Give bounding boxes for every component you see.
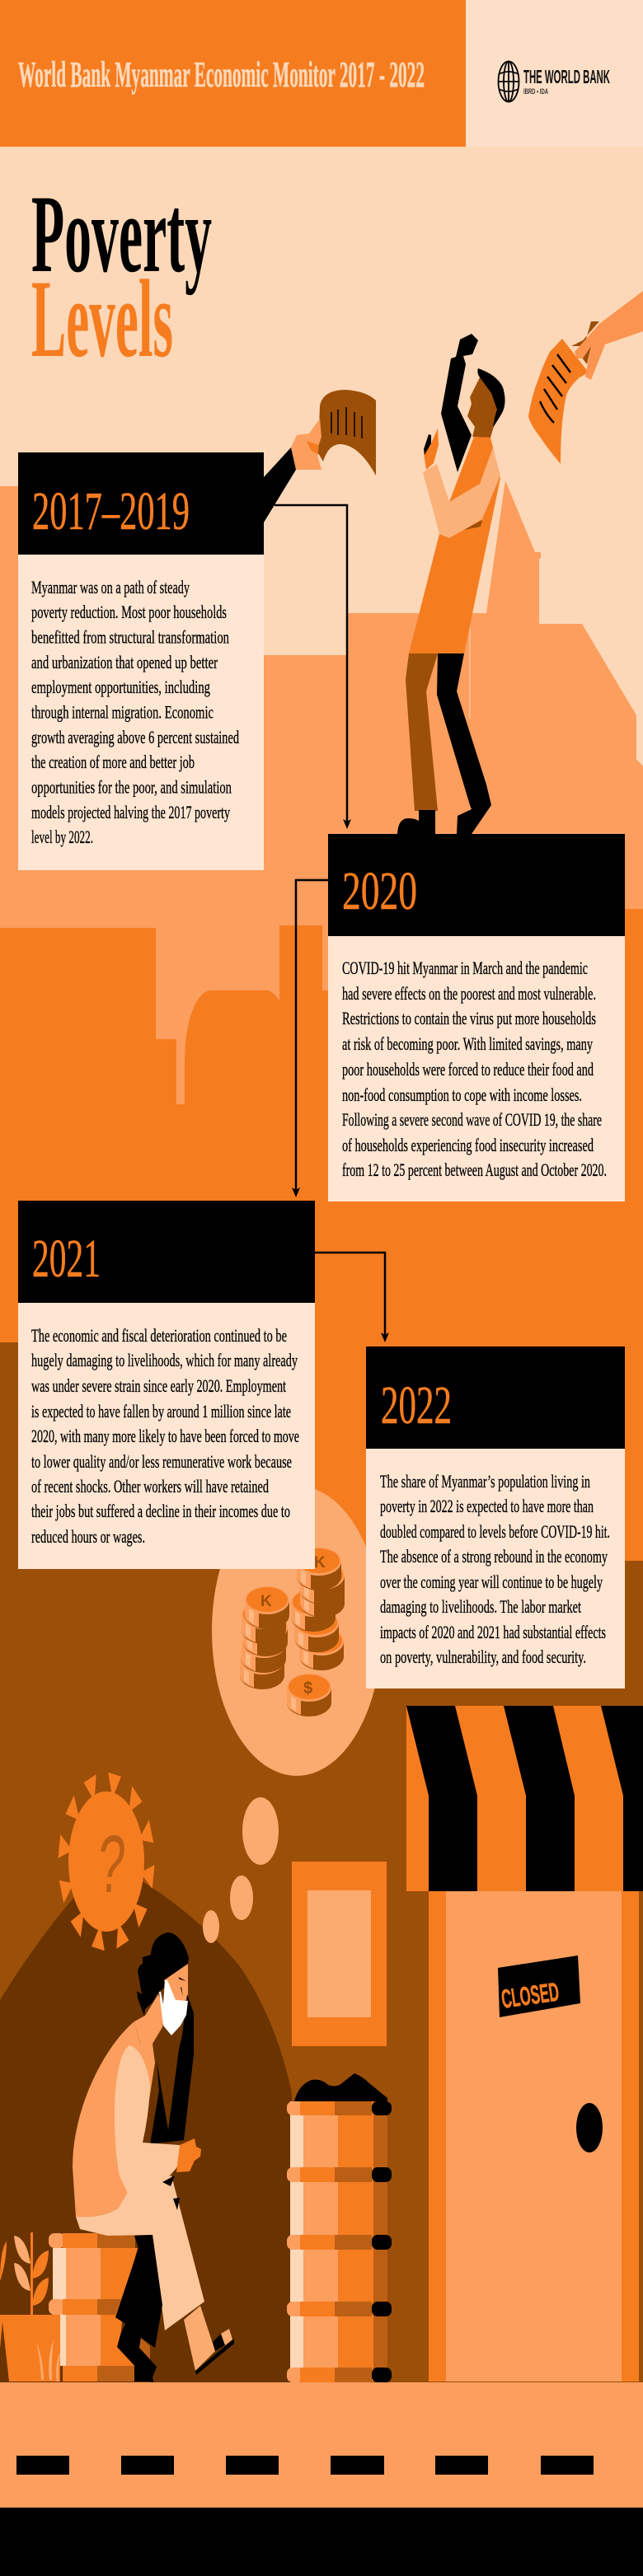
text block: 2017-2019: employment opportunities, including: [31, 677, 210, 697]
title: [31, 173, 212, 381]
trousers: [76, 2176, 204, 2330]
illustration: standing person with raised arm: [397, 334, 505, 834]
text block: 2017-2019: poverty reduction. Most poor households: [31, 602, 227, 622]
face: [164, 1964, 188, 2002]
connector arrow: 2017 to 2020: [275, 505, 351, 829]
sleeve: [120, 2143, 180, 2194]
coin stack: middle: K: [314, 1554, 326, 1571]
jacket panel: [115, 2045, 150, 2192]
road: [0, 2382, 643, 2508]
short barrel: [49, 2233, 138, 2382]
door knob: [576, 2103, 603, 2152]
coin: dollar: [287, 1674, 331, 1717]
thought cloud with coins: [212, 1486, 382, 1776]
background: light orange buildings: [0, 480, 643, 1154]
text block: 2017-2019: growth averaging above 6 percent sustained: [31, 727, 239, 747]
text block: 2017-2019: benefitted from structural transformation: [31, 626, 229, 648]
logo: The World Bank: [498, 61, 610, 102]
road markings: [16, 2456, 594, 2475]
icon: virus with question mark: [58, 1773, 155, 1951]
background: orange buildings: [0, 909, 643, 1566]
text block: 2017-2019: the creation of more and better job: [31, 752, 195, 772]
text block: 2021: reduced hours or wages.: [31, 1526, 145, 1547]
back leg: [115, 2235, 162, 2385]
heading: 2020: 2020: [342, 861, 417, 921]
panel: 2020: [328, 834, 625, 1201]
text block: 2021: is expected to have fallen by around 1 million since late: [31, 1401, 291, 1421]
background: brown wall: [0, 1342, 643, 2390]
closed shop door: [429, 1891, 643, 2382]
text block: 2017-2019: opportunities for the poor, and simulation: [31, 776, 232, 798]
text block: 2017-2019: Myanmar was on a path of steady: [31, 577, 190, 597]
closed sign: [498, 1955, 580, 2017]
torso: [73, 2021, 148, 2217]
potted plant: [0, 2232, 49, 2315]
heading: 2022: 2022: [381, 1375, 452, 1436]
text block: 2017-2019: through internal migration. Economic: [31, 702, 214, 722]
heading: 2017-2019: 2017–2019: [32, 481, 190, 541]
panel: 2022: [366, 1347, 625, 1688]
closed sign: CLOSED: [500, 1976, 561, 2014]
hair: [137, 1932, 189, 2016]
text block: 2021: to lower quality and/or less remunerative work because: [31, 1451, 292, 1472]
text block: 2020: [342, 958, 607, 1180]
thought bubbles: [203, 1797, 279, 1943]
connector arrow: 2021 to 2022: [315, 1253, 389, 1342]
picture frame: [292, 1862, 387, 2046]
hand: [176, 2138, 201, 2172]
illustration: hand holding brown paper: [264, 390, 376, 522]
coin: dollar: $: [303, 1679, 312, 1698]
store awning: [406, 1706, 643, 1891]
coin stack: middle: [291, 1548, 345, 1670]
barrel rings: [287, 2101, 392, 2382]
text block: 2022: [380, 1471, 610, 1667]
header band: [0, 0, 643, 147]
illustration: hand holding orange paper: [528, 291, 643, 464]
coin stack: left: K: [260, 1593, 272, 1610]
text: Poverty: [31, 173, 212, 296]
text block: 2021: hugely damaging to livelihoods, which for many already: [31, 1350, 298, 1370]
panel: 2017-2019: [18, 452, 264, 870]
coin stack: left: [240, 1586, 289, 1689]
text block: 2017-2019: [31, 577, 239, 847]
title: Levels: [31, 258, 173, 381]
text block: 2017-2019: and urbanization that opened up better: [31, 652, 218, 672]
mask: [159, 1980, 188, 2035]
text block: 2021: The economic and fiscal deterioration continued to be: [31, 1325, 287, 1346]
text block: 2017-2019: level by 2022.: [31, 827, 93, 847]
connector arrow: 2020 to 2021: [292, 880, 328, 1197]
heading: 2021: 2021: [32, 1229, 101, 1289]
logo: The World Bank: IBRD • IDA: [523, 87, 548, 96]
tall barrel: [287, 2073, 392, 2382]
text block: 2021: [31, 1325, 299, 1547]
black arm and vest: [150, 1994, 194, 2144]
text block: 2021: was under severe strain since early 2020. Employment: [31, 1375, 286, 1396]
text block: 2021: their jobs but suffered a decline in their incomes due to: [31, 1501, 290, 1521]
panel: 2021: [18, 1201, 315, 1569]
question mark: ?: [94, 1819, 129, 1910]
seated masked person: [73, 1932, 234, 2385]
front leg and sandal: [184, 2306, 215, 2371]
text block: 2021: 2020, with many more likely to have been forced to move: [31, 1426, 299, 1446]
text block: 2021: of recent shocks. Other workers will have retained: [31, 1476, 269, 1496]
background: dark brown hill: [0, 1871, 292, 2390]
plant pot and grass: [0, 2315, 61, 2382]
text block: 2017-2019: models projected halving the 2017 poverty: [31, 802, 230, 822]
